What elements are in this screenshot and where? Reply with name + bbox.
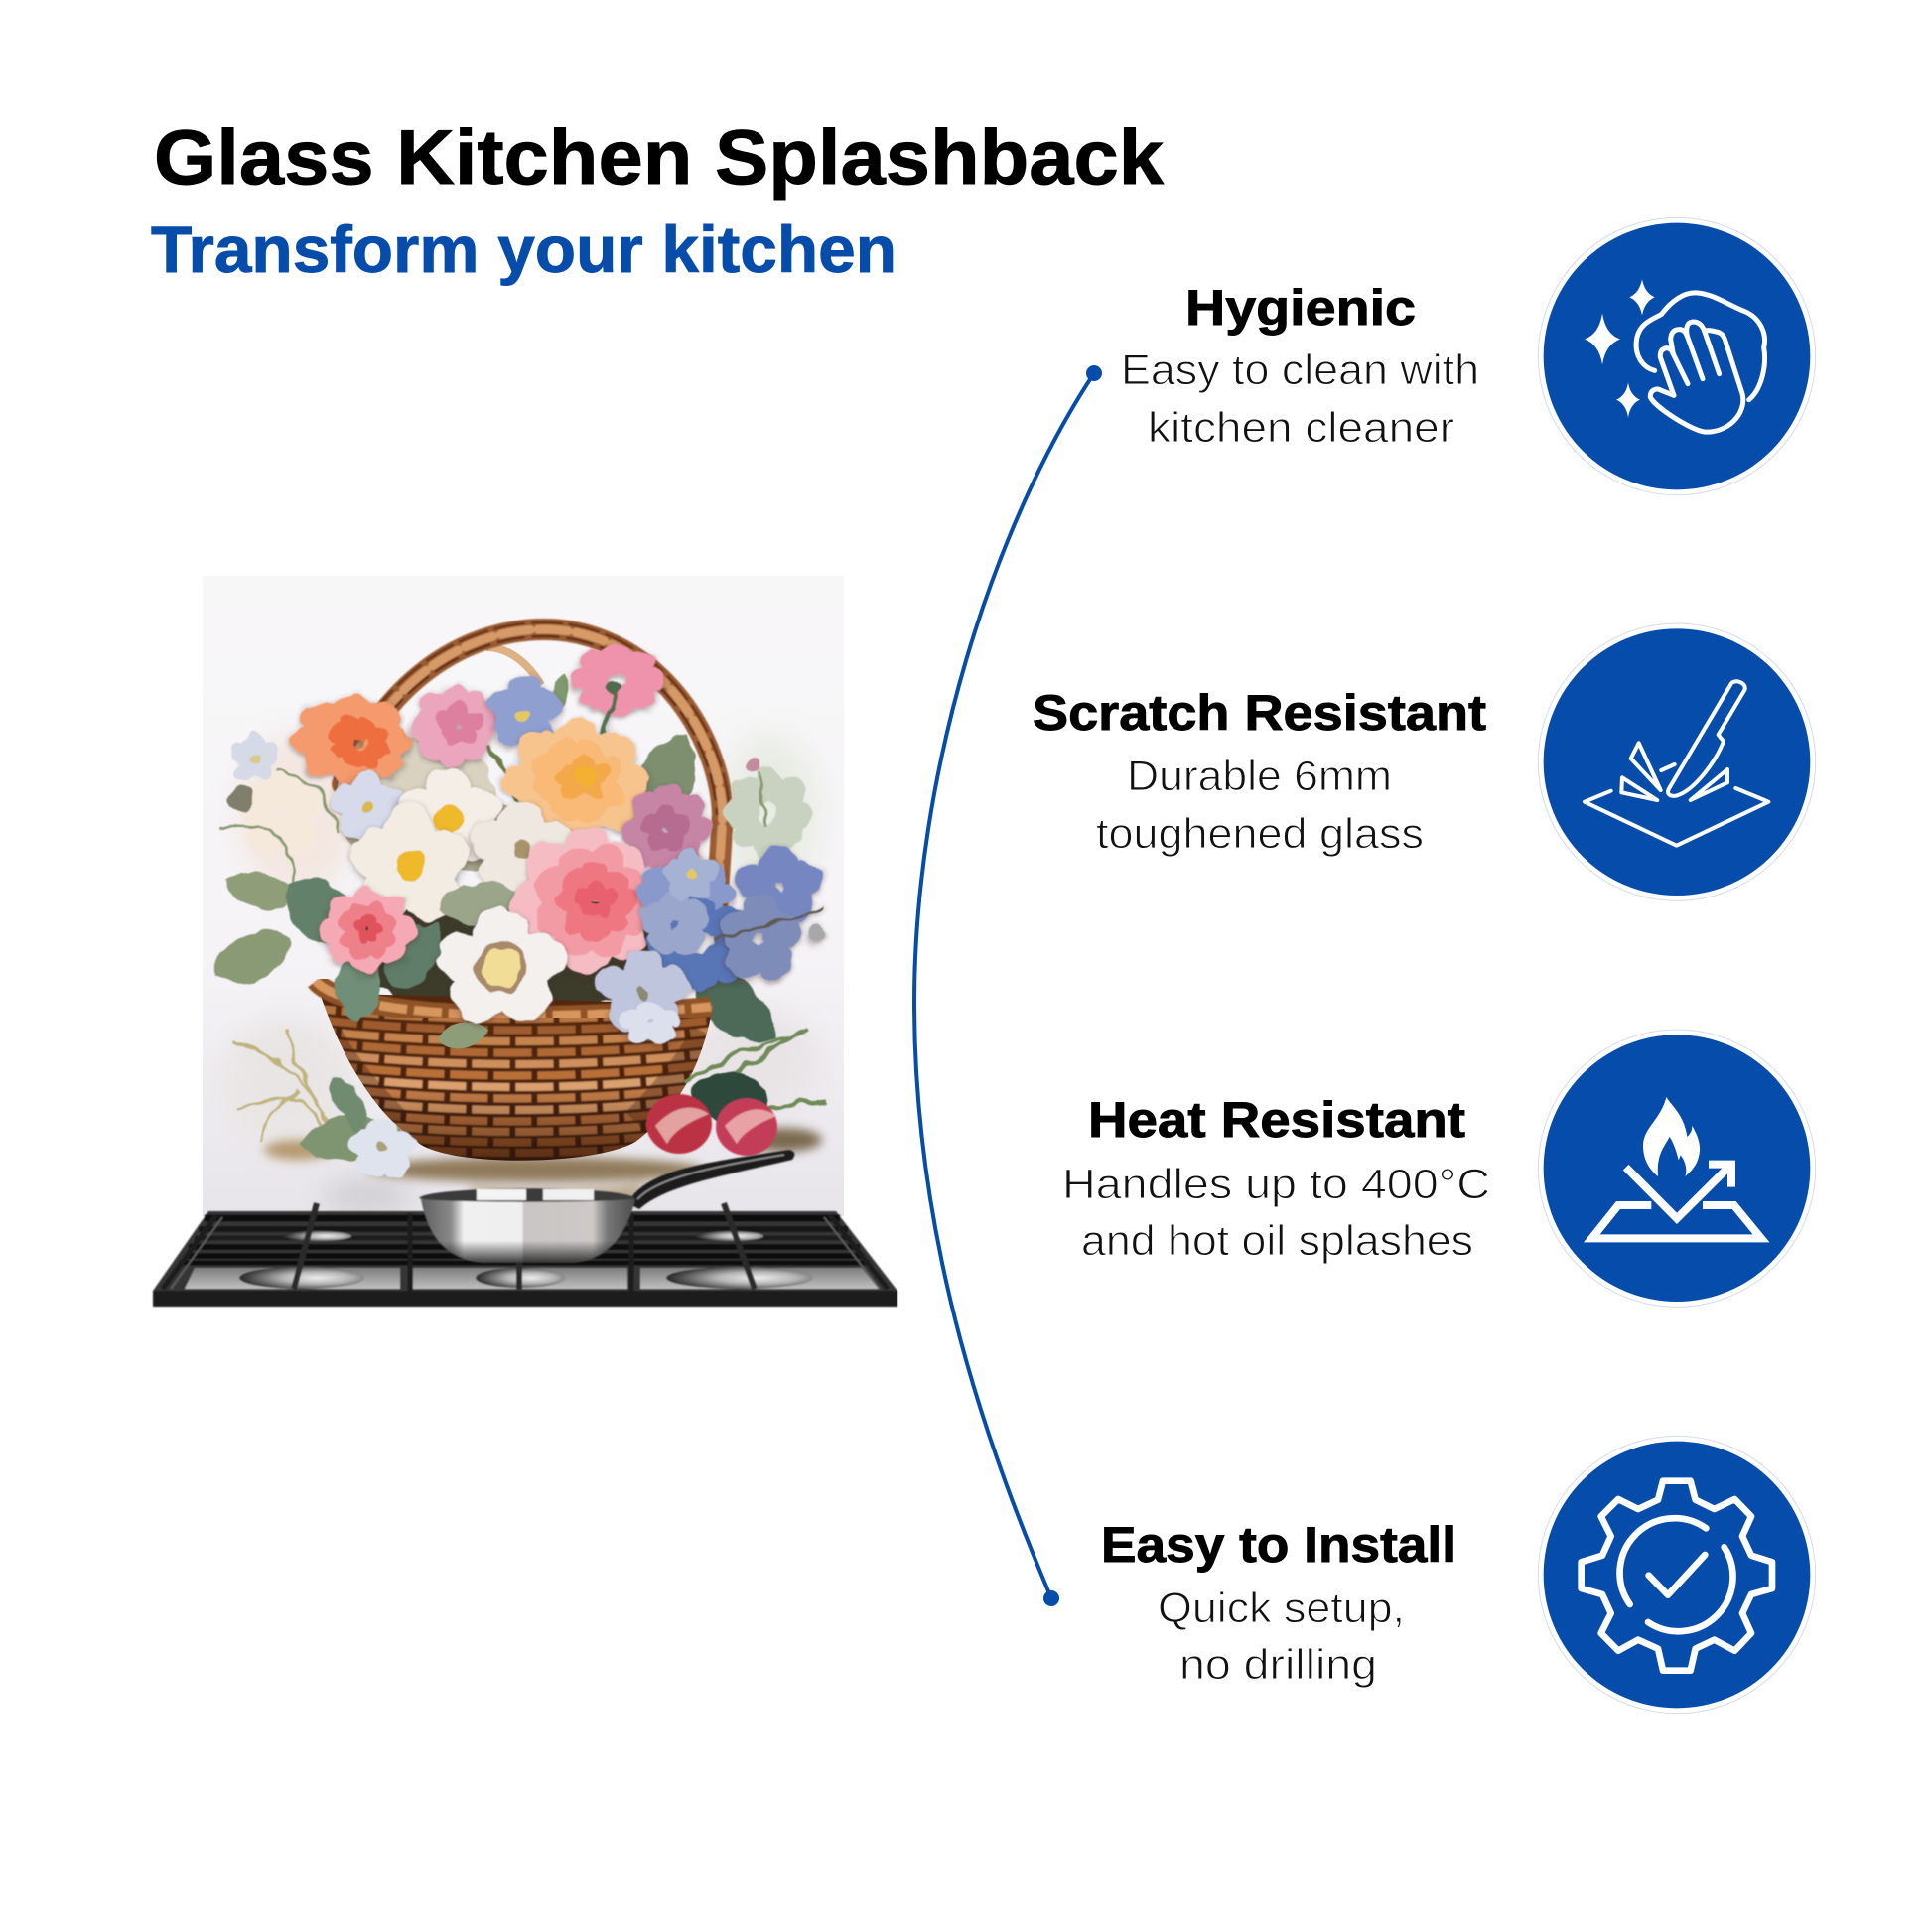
pale background flowers [220,733,812,894]
heading: Hygienic [1185,280,1416,336]
leaves among flowers [435,876,524,929]
pan rim [419,1188,635,1202]
heading: Scratch Resistant [1033,685,1486,741]
icon: flame on surface with arrow [1538,1030,1816,1307]
description: Handles up to 400°C [1062,1161,1490,1208]
small blue-white flower [329,770,406,844]
orange carnation [291,693,412,786]
foliage behind bouquet [205,670,791,1060]
feature: scratch resistant [1033,685,1486,858]
watercolour washes [223,735,819,1212]
large pink peony [511,825,668,978]
pan body [421,1199,635,1263]
icon: hand wiping with sparkles [1538,217,1816,495]
front burners [239,1267,813,1289]
big white flower [431,909,572,1031]
basket back handle [486,647,541,685]
description: Durable 6mm [1127,753,1392,800]
pink rose top [411,683,496,768]
frying pan [419,1150,794,1263]
description: Quick setup, [1158,1585,1405,1632]
pale blue flower bottom [591,951,696,1047]
pan reflections [477,1189,526,1200]
grate dividers [163,1213,888,1291]
peach rose [503,719,648,844]
description: and hot oil splashes [1081,1217,1473,1265]
back burners [284,1231,763,1241]
connecting curve with end dots [914,365,1102,1606]
blue flower cluster [634,848,755,990]
leaf on basket [435,1017,491,1053]
wicker basket bowl [322,995,713,1161]
mauve peony [622,784,712,874]
gas hob [153,1203,897,1307]
product illustration: splashback panel above hob [153,576,897,1307]
description [1121,346,1479,452]
pot supports [294,1203,755,1289]
pan handle [627,1150,794,1209]
dark mass behind bouquet [347,894,685,1013]
icon: knife on glass [1538,623,1816,900]
basket rim [316,981,711,1016]
title: Glass Kitchen Splashback [154,113,1165,201]
hob top surface [153,1211,897,1291]
description [1096,753,1424,858]
description [1158,1585,1405,1689]
fruits [646,1094,777,1156]
blue flower top [483,675,564,754]
icon: gear with check mark [1538,1436,1816,1714]
feature: hygienic [1121,280,1479,452]
heading: Easy to Install [1101,1517,1456,1573]
small pink rose [319,888,416,973]
basket handle [336,622,730,908]
description: kitchen cleaner [1148,404,1454,452]
heading: Heat Resistant [1088,1092,1465,1148]
white anemone upper [391,768,506,869]
ground wash [264,1128,822,1205]
description: toughened glass [1096,810,1424,858]
front edge [153,1291,897,1307]
grate highlight bars [179,1218,870,1263]
feature: heat resistant [1062,1092,1490,1265]
ground foliage and white flower [233,1028,829,1182]
splashback panel with floral basket painting [203,576,844,1216]
pink poppy [571,642,664,737]
subtitle: Transform your kitchen [151,212,897,286]
description: no drilling [1179,1641,1377,1689]
blue flower right [710,847,827,988]
white flower centre [464,802,579,898]
stem [486,745,518,824]
flower bouquet [269,642,827,1047]
feature: easy to install [1101,1517,1456,1689]
white anemone lower [344,805,477,930]
description [1062,1161,1490,1265]
tray windows [185,1268,879,1289]
description: Easy to clean with [1121,346,1479,394]
